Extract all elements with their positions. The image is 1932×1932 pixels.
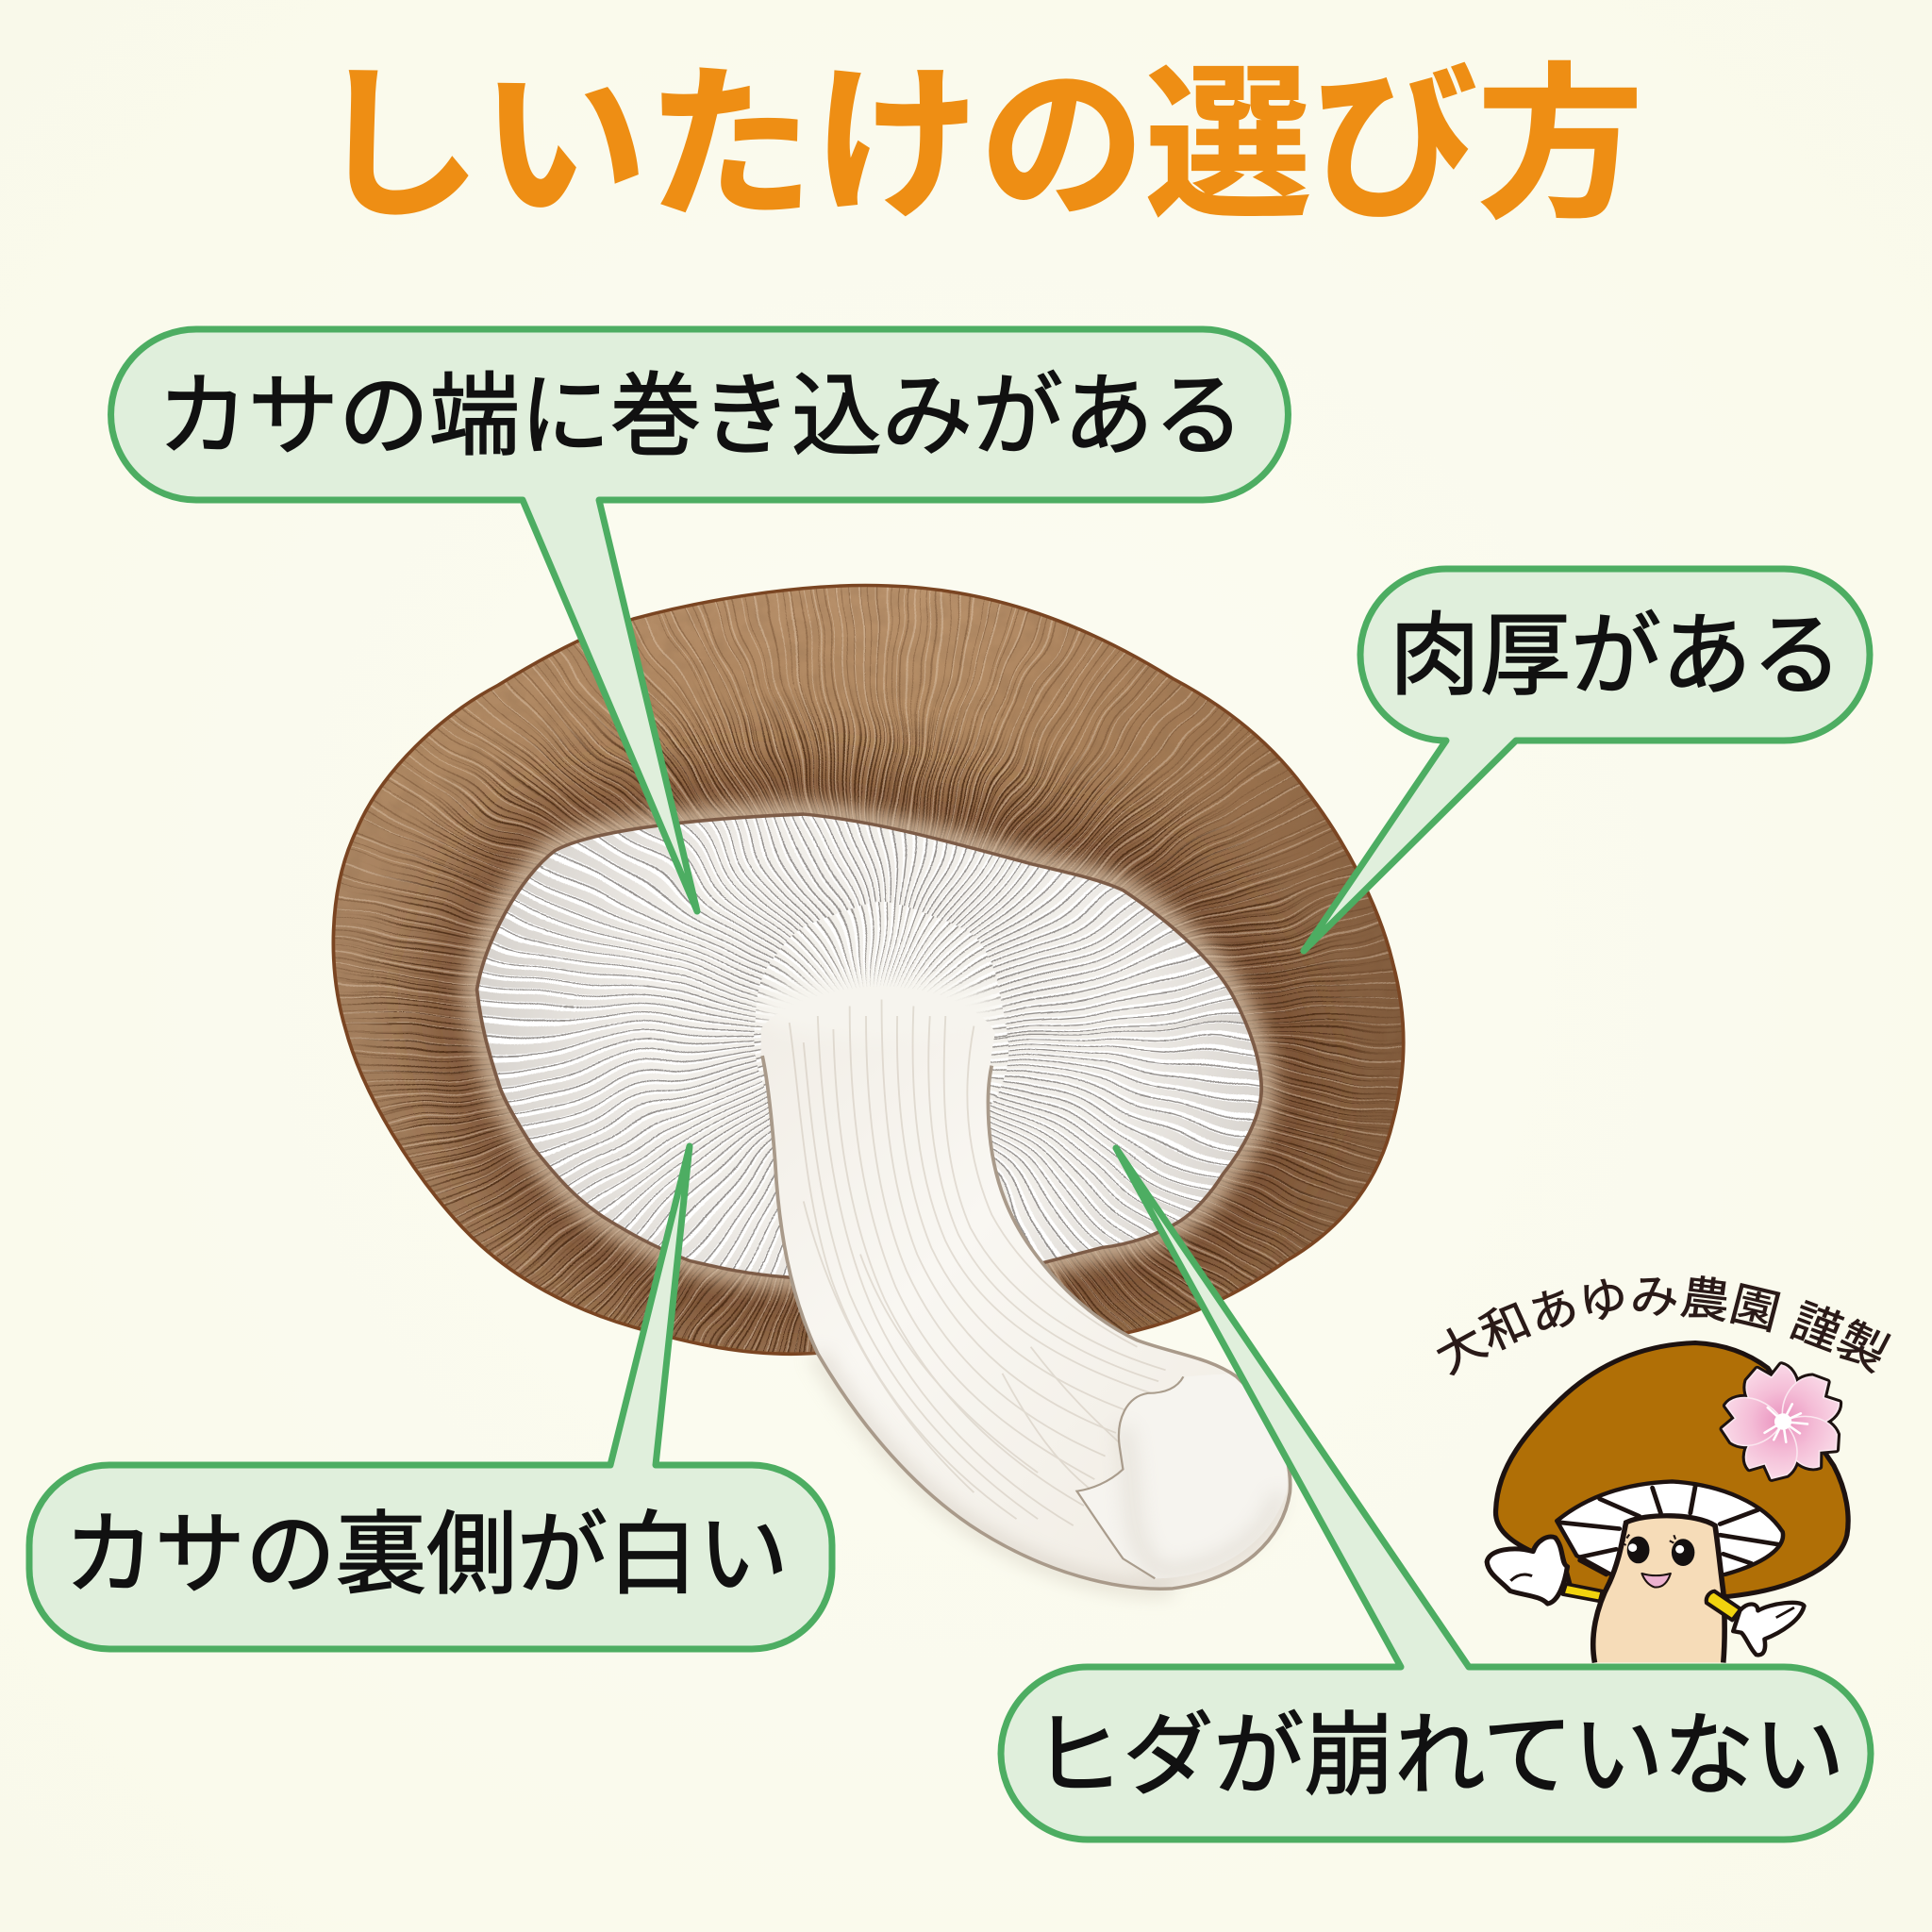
stem: [754, 976, 1291, 1589]
right sleeve and hand: [1707, 1591, 1804, 1655]
callout: cap edge curled in: [111, 329, 1288, 911]
callout: white underside: [29, 1146, 832, 1649]
left sleeve and hand: [1487, 1537, 1603, 1604]
callout: cap edge curled in: カサの端に巻き込みがある: [158, 366, 1244, 467]
curved label: 大和あゆみ農園 謹製: [1436, 1275, 1891, 1375]
soft flare where the stem meets the gills: [754, 976, 1002, 1040]
title: しいたけの選び方: [315, 54, 1643, 239]
mascot face: [1622, 1535, 1694, 1588]
mascot gills: [1557, 1481, 1783, 1579]
illustration: shiitake mushroom: [321, 566, 1457, 1589]
callout: gills intact: [1001, 1148, 1871, 1840]
cherry blossom: [1722, 1362, 1846, 1484]
callout: gills intact: ヒダが崩れていない: [1032, 1706, 1845, 1807]
mascot: mushroom character with curved maker label: [1436, 1275, 1891, 1663]
stem cut end: [1077, 1374, 1288, 1578]
gills: [475, 812, 1264, 1279]
mascot body: [1593, 1516, 1724, 1663]
callout: thick flesh: 肉厚がある: [1390, 606, 1842, 707]
callout: white underside: カサの裏側が白い: [64, 1505, 789, 1606]
mushroom cap: [332, 583, 1406, 1357]
mascot cap: [1496, 1343, 1848, 1596]
callout: thick flesh: [1304, 569, 1870, 951]
